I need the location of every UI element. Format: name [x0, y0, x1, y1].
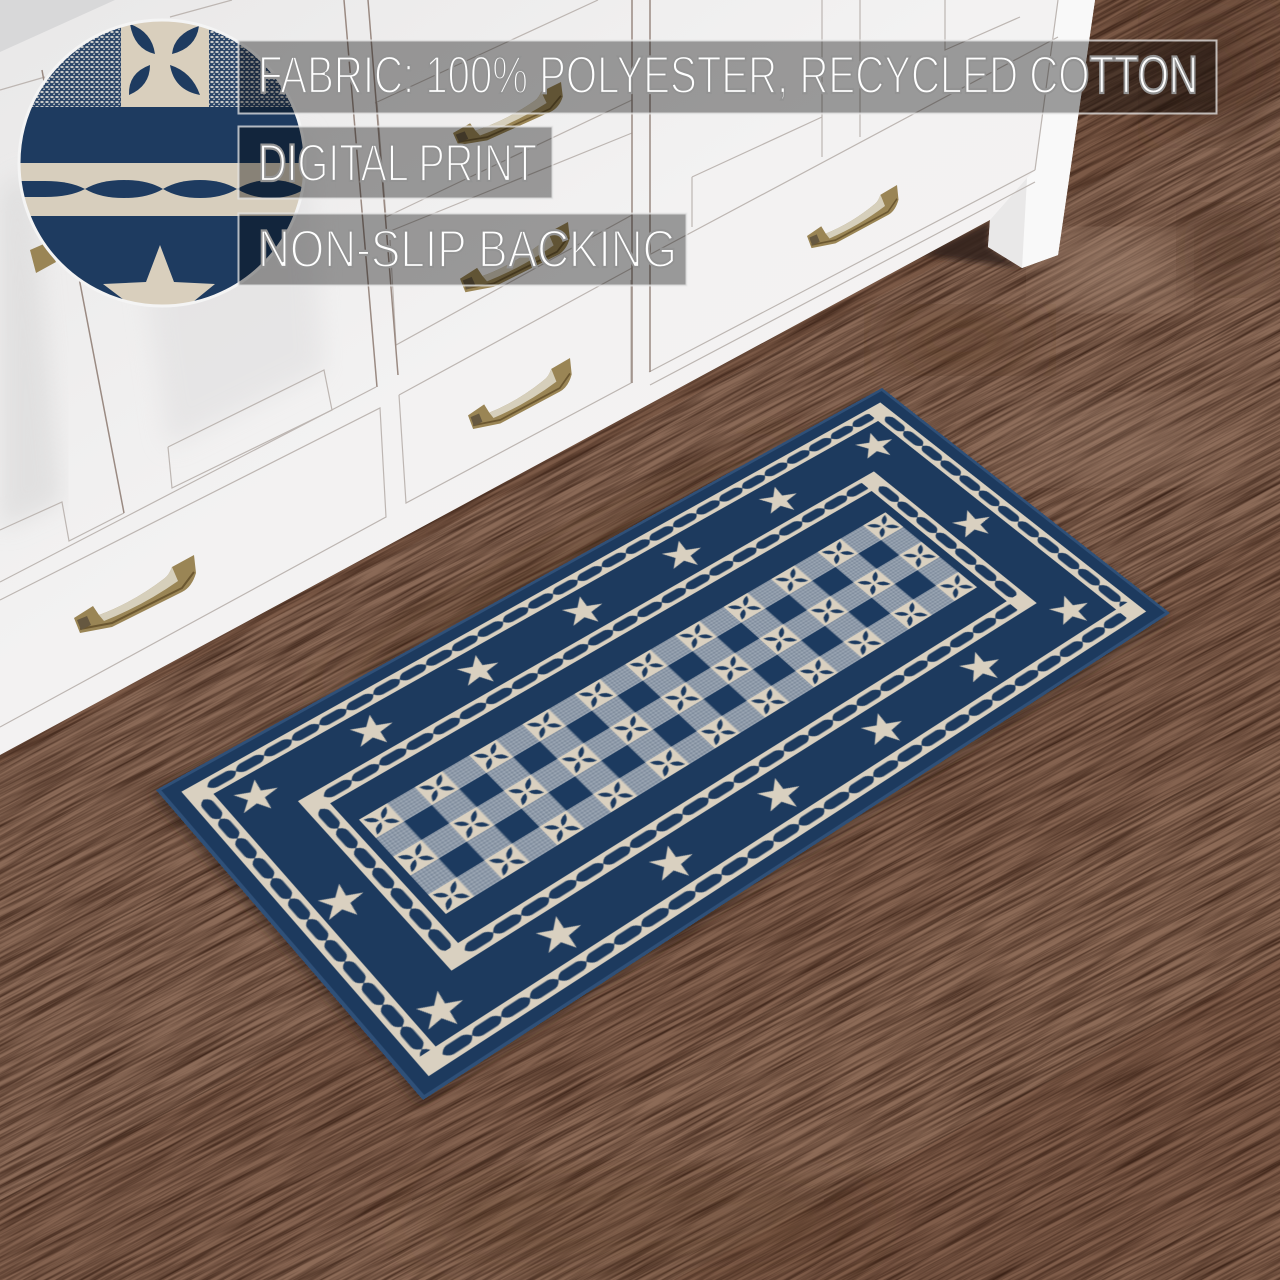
stars — [210, 421, 1113, 1046]
label: non-slip backing — [238, 214, 686, 286]
label: digital print: DIGITAL PRINT — [258, 134, 537, 193]
icon: cabinet handles — [30, 82, 898, 633]
white cabinet body — [0, 0, 1095, 755]
rug base — [159, 390, 1167, 1097]
beige stripe with lens chain — [20, 163, 305, 216]
inner chain border — [298, 471, 1037, 971]
patch tile with petals — [121, 20, 209, 107]
infographic overlay: fabric detail circle and labels — [18, 18, 1218, 308]
gingham swatch — [32, 28, 292, 107]
rug — [156, 388, 1170, 1100]
outer chain border — [181, 402, 1146, 1076]
checkered centre panel — [359, 512, 977, 914]
cabinet panel lines — [0, 0, 1058, 727]
rug shadow — [150, 393, 1170, 1104]
label: non-slip backing: NON-SLIP BACKING — [258, 220, 677, 279]
cabinet door gaps — [42, 0, 650, 513]
fabric close-up circle — [19, 20, 305, 306]
cabinet shadow on floor — [921, 222, 1022, 268]
star on fabric — [103, 245, 215, 306]
label: digital print — [238, 126, 552, 198]
